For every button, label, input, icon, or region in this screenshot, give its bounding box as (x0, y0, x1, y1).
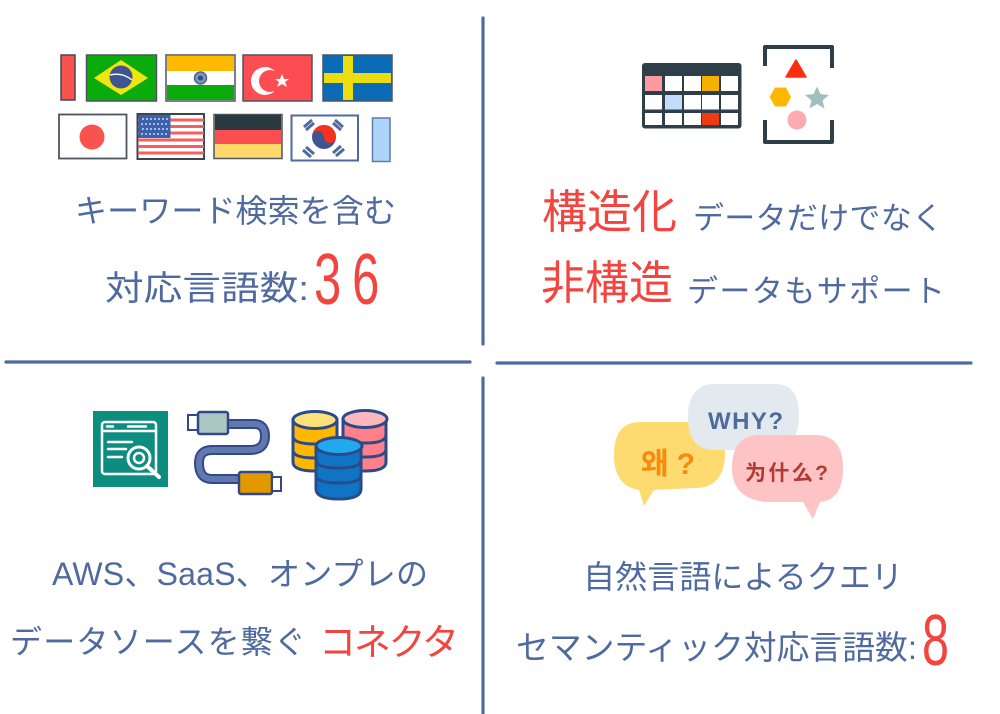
panel: structured data (541, 47, 945, 309)
text: not only data: データだけでなく (693, 201, 943, 236)
text: data also supported: データもサポート (687, 274, 945, 309)
text: natural language queries: 自然言語によるクエリ (583, 559, 903, 595)
icon: cable (188, 412, 281, 494)
text: supported languages: 対応言語数: (105, 270, 309, 308)
text: structured: 構造化 (542, 186, 677, 238)
text: unstructured: 非構造 (541, 257, 673, 309)
icon: flags (59, 55, 392, 162)
panel: natural language query (516, 384, 949, 681)
bubble: yellow: 왜? (641, 448, 695, 481)
bubble: grey: WHY? (708, 408, 783, 435)
panel: connectors (10, 410, 459, 663)
icon: table (642, 63, 742, 128)
icon: databases (293, 410, 387, 499)
icon: speech bubbles (614, 384, 843, 519)
icon: search window (93, 411, 168, 487)
icon: unstructured shapes (765, 47, 832, 142)
text: semantic languages: セマンティック対応言語数: (516, 629, 917, 666)
bubble: pink (732, 435, 843, 519)
text: connects data sources: データソースを繋ぐ (10, 624, 306, 660)
text: connectors: コネクタ (319, 622, 459, 663)
bubble: yellow (614, 422, 725, 506)
number: 8: 8 (922, 601, 949, 681)
number: 36: 36 (314, 240, 390, 320)
text: AWS, SaaS, on-prem: AWS、SaaS、オンプレの (52, 556, 428, 592)
bubble: pink: 为什么? (745, 462, 828, 485)
text: keyword search: キーワード検索を含む (75, 193, 396, 229)
panel: languages (59, 55, 396, 320)
bubble: grey (688, 384, 799, 450)
